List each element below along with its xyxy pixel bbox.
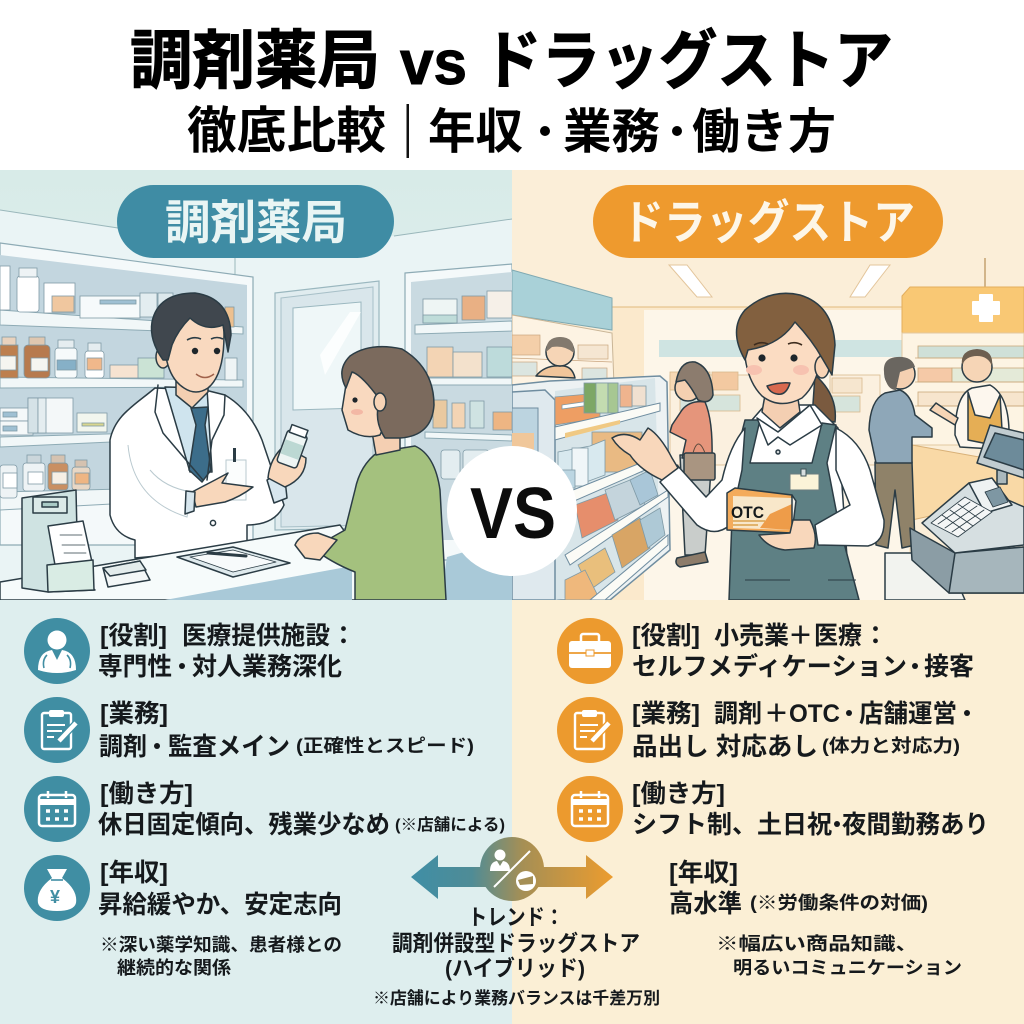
icon: yen money bag [24, 855, 90, 921]
row: working style [24, 776, 505, 842]
heading line 2: 業務 [563, 106, 660, 159]
counter under register [885, 553, 965, 600]
left sleeve [660, 428, 745, 532]
row: duties [24, 697, 474, 763]
row: role: ＋ [788, 622, 813, 650]
row: salary [669, 859, 928, 918]
row: duties: ＋ [764, 700, 789, 728]
row: role: 医療 [814, 622, 862, 650]
trend text: トレンド： [468, 905, 564, 930]
row: working style [557, 776, 989, 842]
row: salary: (※労働条件の対価) [750, 893, 928, 913]
trend text: (ハイブリッド) [445, 956, 585, 981]
row: role: 小売業 [714, 622, 789, 650]
hanging sign and pharmacy counter shelves [902, 258, 1024, 520]
boxes row 2 [555, 432, 642, 490]
row: role: セルフメディケーション [632, 652, 907, 681]
row: salary: 昇給緩やか、安定志向 [98, 891, 342, 919]
note [716, 934, 962, 978]
leaflet stand [22, 490, 95, 592]
shelf row 1 items [0, 266, 234, 327]
panel: pharmacy illustration [0, 170, 512, 600]
row: role: ： [863, 622, 888, 650]
gondola shelf [512, 376, 670, 600]
row: working style: 夜間勤務あり [842, 811, 989, 839]
row: salary: [年収] [669, 859, 738, 887]
row: working style: [働き方] [632, 780, 725, 808]
pharmacy details [24, 618, 505, 978]
icon: clipboard [557, 697, 623, 763]
row: role [557, 618, 974, 684]
row: working style: [働き方] [100, 780, 193, 808]
row: role: 専門性 [98, 653, 172, 681]
clipboard [177, 547, 290, 577]
apron [729, 420, 859, 600]
heading line 1: vs [400, 29, 467, 98]
small box on counter [103, 561, 150, 587]
floor beyond counter [445, 552, 512, 600]
row: role: 接客 [924, 653, 974, 681]
row: duties: [業務] [632, 700, 700, 728]
heading line 2 [187, 103, 836, 159]
heading line 2: 徹底比較 [187, 103, 386, 159]
trend text: 調剤併設型ドラッグストア [392, 931, 640, 956]
row: duties: OTC [789, 700, 840, 728]
holding hand [759, 520, 815, 550]
row: duties: (正確性とスピード) [296, 736, 474, 756]
icon: yen money bag: ¥ [50, 887, 60, 907]
icon: calendar [24, 776, 90, 842]
note: 継続的な関係 [117, 957, 231, 978]
row: role: 医療提供施設 [182, 622, 330, 650]
panel label: pharmacy: 調剤薬局 [165, 196, 347, 249]
boxes row 4 [565, 508, 665, 600]
shirt torso [751, 404, 848, 554]
panel label: pharmacy [117, 185, 394, 258]
OTC box: OTC [731, 503, 764, 522]
row: role [24, 618, 356, 684]
row: duties: [業務] [100, 700, 168, 728]
ceiling lights [669, 265, 890, 297]
row: working style: (※店舗による) [395, 815, 505, 834]
row: salary [24, 855, 342, 921]
row: duties: 調剤 [714, 700, 762, 728]
row: duties: (体力と対応力) [822, 736, 960, 756]
shelf row 3 items [0, 398, 107, 435]
medicine bottle [276, 424, 310, 469]
background customer man [869, 357, 932, 548]
icon: clipboard [24, 697, 90, 763]
row: duties: 品出し 対応あし [632, 733, 818, 761]
panel label: drugstore: ドラッグストア [622, 196, 915, 249]
drugstore details [557, 618, 989, 978]
boxes row 3 [575, 470, 658, 538]
background shopper [670, 362, 715, 567]
icon: calendar [557, 776, 623, 842]
door [275, 281, 379, 530]
row: salary: 高水準 [669, 890, 742, 918]
head [176, 378, 208, 408]
row: salary: [年収] [100, 859, 168, 887]
row: role: [役割] [632, 622, 700, 650]
counter [0, 525, 365, 600]
shelf row 4 items [0, 455, 90, 498]
row: working style: シフト制、土日祝 [632, 811, 832, 839]
icon: briefcase [557, 618, 623, 684]
pharmacist [110, 293, 310, 558]
right medicine shelf [405, 264, 512, 560]
row: role: [役割] [100, 622, 167, 650]
customer [295, 347, 446, 600]
heading line 1: 調剤薬局 [130, 25, 380, 97]
panel: drugstore illustration [512, 170, 1024, 600]
heading line 1 [130, 25, 893, 98]
trend text [373, 905, 660, 1008]
main staff [612, 293, 884, 600]
side shelf with blue sign [512, 270, 614, 385]
heading line 2: 年収 [428, 106, 523, 159]
cash register [910, 425, 1024, 593]
panel: lower right background [512, 600, 1024, 1024]
ponytail [812, 375, 835, 422]
row: duties: 監査メイン [168, 733, 290, 761]
VS badge [447, 446, 577, 576]
background shelving [659, 340, 902, 465]
VS badge: VS [470, 474, 556, 554]
name tag [790, 474, 819, 490]
title [130, 25, 893, 159]
row: duties: 調剤 [99, 733, 147, 761]
left medicine shelf [0, 243, 253, 545]
row: role: ： [331, 622, 356, 650]
shelf row 2 items [0, 337, 237, 380]
panel: lower left background [0, 600, 512, 1024]
row: role: 対人業務深化 [192, 653, 342, 681]
row: working style: 休日固定傾向、残業少なめ [98, 810, 390, 839]
note: ※幅広い商品知識、 [716, 934, 918, 954]
panel label: drugstore [593, 185, 943, 258]
icon: pharmacist [24, 618, 90, 684]
head [762, 392, 800, 428]
heading line 1: ドラッグストア [483, 25, 893, 97]
boxes row 1 [555, 383, 646, 425]
right sleeve [815, 428, 884, 546]
row: duties [557, 697, 970, 763]
background staff [930, 349, 1009, 450]
row: duties: 店舗運営 [859, 700, 957, 728]
note: ※深い薬学知識、患者様との [100, 934, 342, 955]
sleeve and open hand [128, 445, 192, 517]
note [100, 934, 342, 978]
pointing hand [612, 428, 678, 480]
note: 明るいコミュニケーション [733, 958, 962, 978]
trend arrow [411, 837, 613, 901]
OTC box [727, 488, 796, 533]
trend text: ※店舗により業務バランスは千差万別 [373, 988, 660, 1008]
heading line 2: 働き方 [692, 106, 836, 159]
